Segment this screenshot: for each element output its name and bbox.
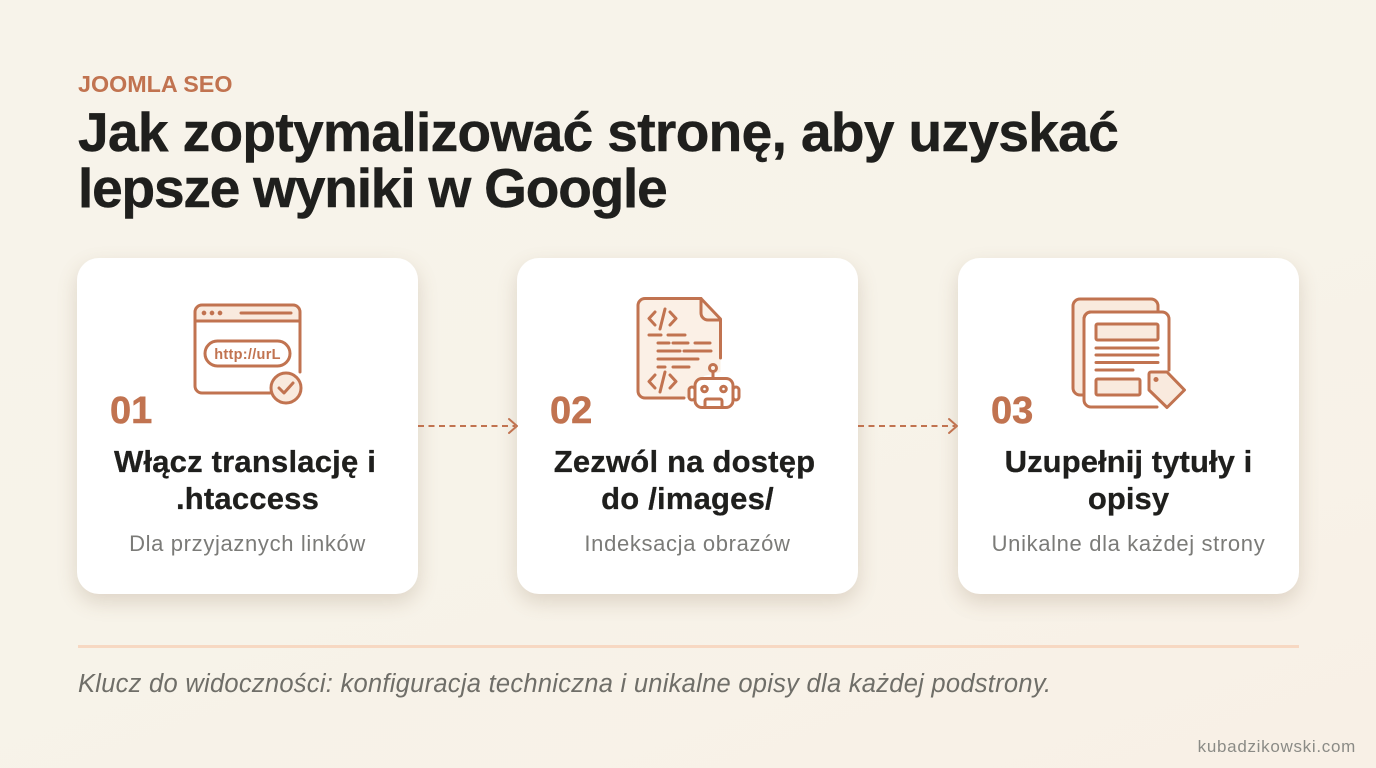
- step number 02: 02: [550, 390, 592, 432]
- icon: pages with tag: [1073, 299, 1184, 408]
- step 1 description: Dla przyjaznych linków: [129, 531, 366, 556]
- step 2 description: Indeksacja obrazów: [584, 531, 791, 556]
- step 2 heading: [554, 444, 815, 516]
- title: lepsze wyniki w Google: [78, 157, 667, 219]
- closing note: Klucz do widoczności: konfiguracja techniczna i unikalne opisy dla każdej podstrony.: [78, 670, 1051, 698]
- step 2 heading: do /images/: [601, 481, 774, 516]
- step number 03: 03: [991, 390, 1033, 432]
- panel: step 3: [958, 258, 1299, 594]
- step number 01: 01: [110, 390, 152, 432]
- arrow: step 1 to 2: [418, 419, 517, 433]
- divider: [78, 645, 1299, 648]
- step 3 description: Unikalne dla każdej strony: [992, 531, 1265, 556]
- step 3 heading: [1005, 444, 1252, 516]
- step 3 heading: Uzupełnij tytuły i: [1005, 444, 1252, 479]
- panel: step 2: [517, 258, 858, 594]
- panel: step 1: [77, 258, 418, 594]
- step 1 heading: .htaccess: [176, 481, 319, 516]
- icon: browser with url: [195, 305, 301, 403]
- eyebrow label: JOOMLA SEO: [78, 71, 232, 97]
- arrow: step 2 to 3: [858, 419, 957, 433]
- icon: code document with robot: [638, 298, 739, 408]
- title: [78, 101, 1118, 219]
- step 3 heading: opisy: [1088, 481, 1169, 516]
- icon: browser with url: http://urL: [214, 347, 281, 363]
- footer credit: kubadzikowski.com: [1198, 737, 1356, 756]
- step 1 heading: [114, 444, 376, 516]
- step 2 heading: Zezwól na dostęp: [554, 444, 815, 479]
- step 1 heading: Włącz translację i: [114, 444, 376, 479]
- title: Jak zoptymalizować stronę, aby uzyskać: [78, 101, 1118, 163]
